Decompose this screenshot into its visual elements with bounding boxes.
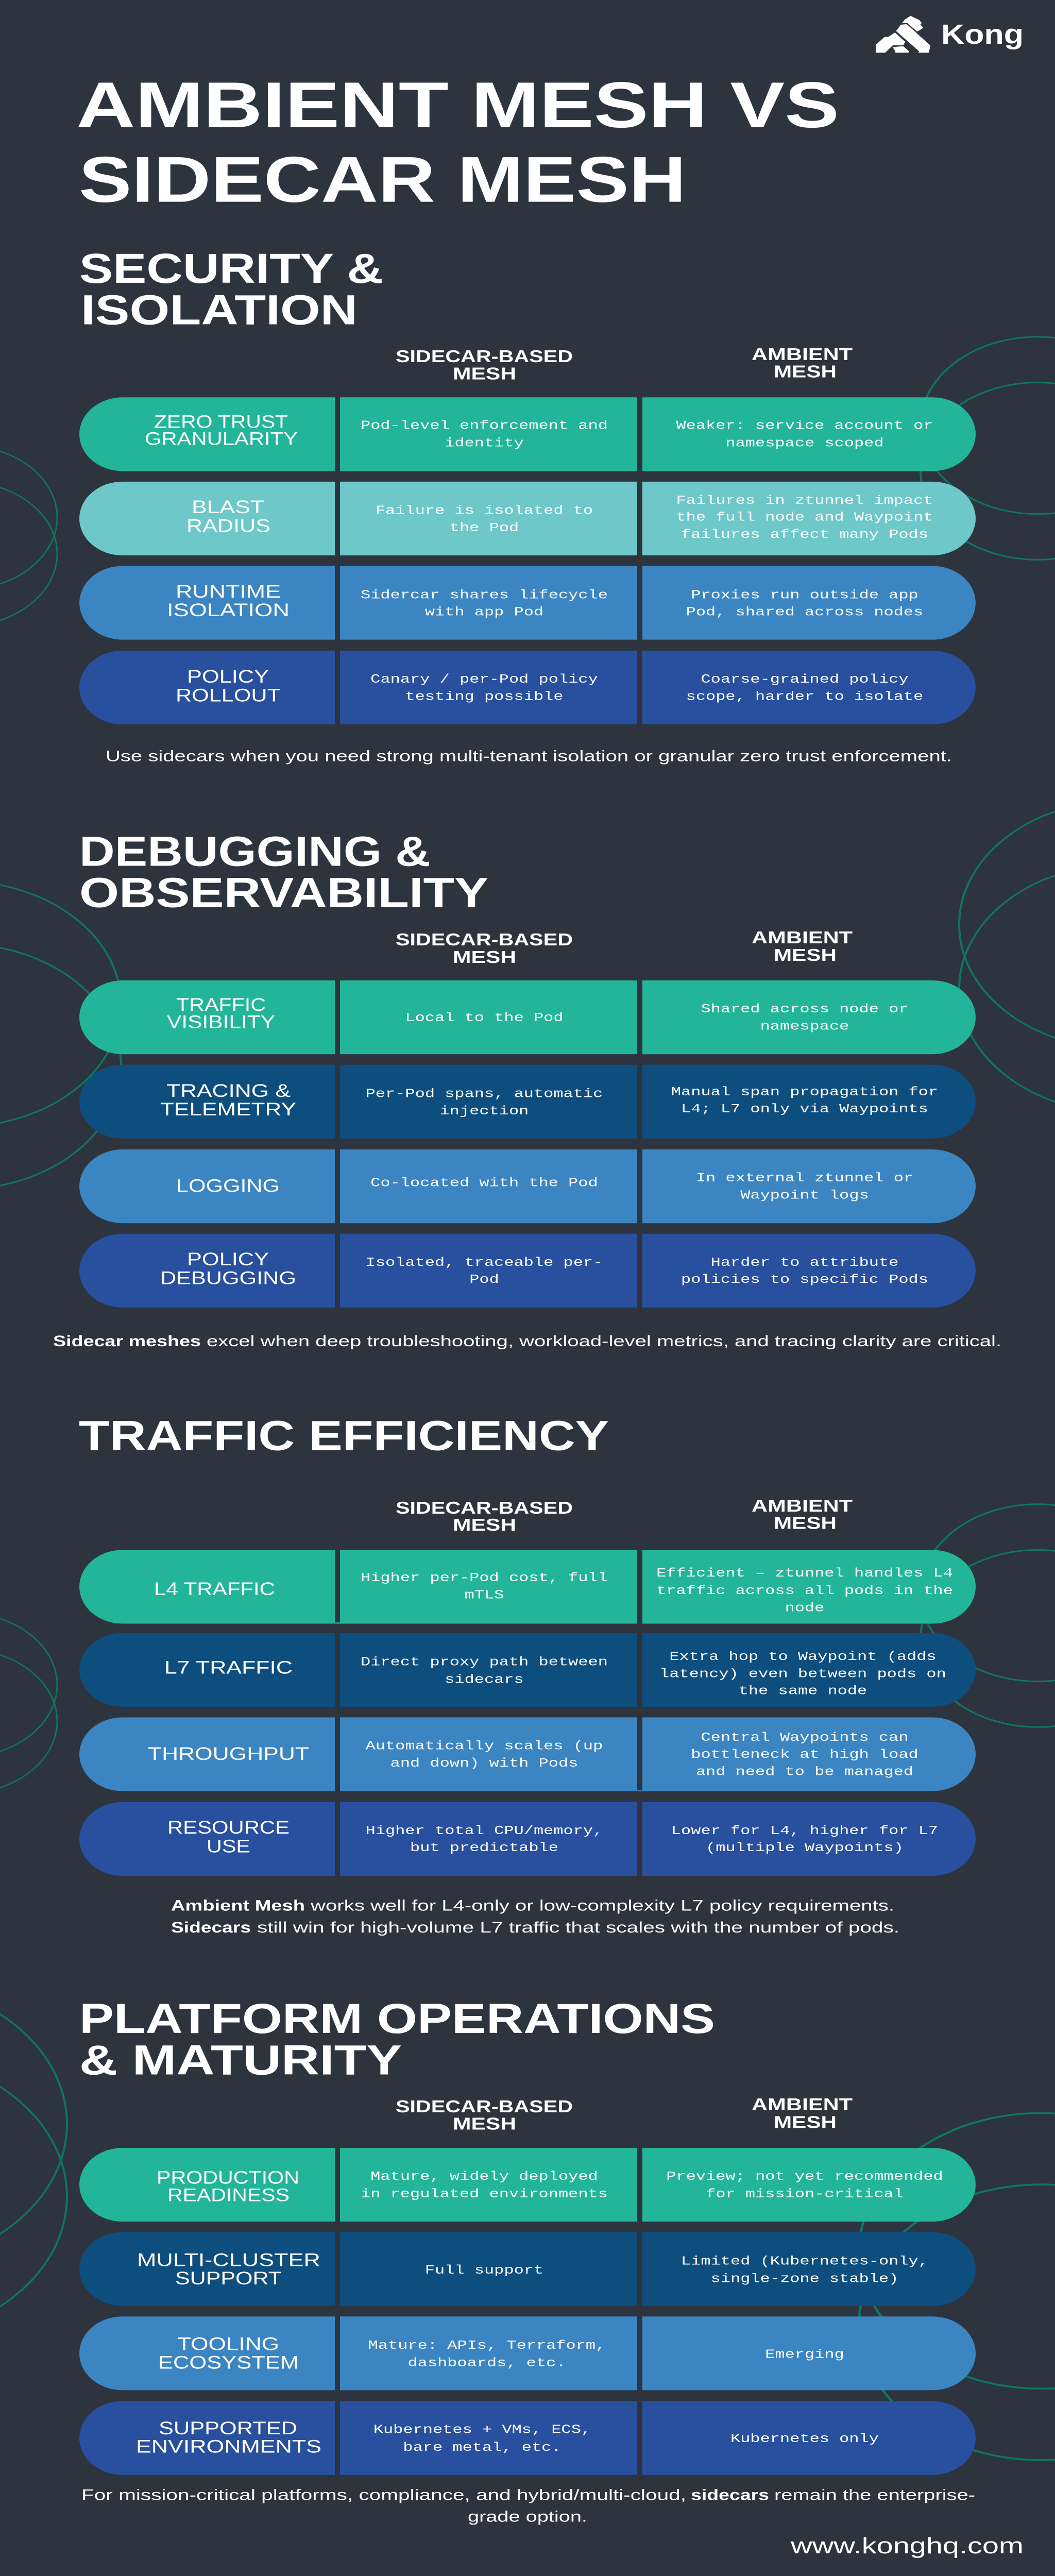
row: multi-cluster support: single-zone stable) — [711, 2272, 898, 2286]
row: zero trust granularity: namespace scoped — [725, 436, 884, 450]
row: zero trust granularity: ZERO TRUST — [154, 411, 288, 432]
row: L4 traffic: Efficient – ztunnel handles L4 — [656, 1566, 953, 1581]
row: L4 traffic: Higher per-Pod cost, full — [361, 1570, 608, 1585]
row: throughput: bottleneck at high load — [691, 1748, 918, 1762]
row: logging: Waypoint logs — [740, 1188, 869, 1202]
column header: ambient mesh: AMBIENT — [752, 1497, 853, 1516]
row: blast radius: BLAST — [192, 497, 264, 517]
callout: security summary: Use sidecars when you need strong multi-tenant isolation or granular zero trust enforcement. — [106, 748, 952, 765]
row: L4 traffic: node — [785, 1601, 824, 1615]
column header: ambient mesh: MESH — [774, 363, 837, 381]
row: policy debugging — [79, 1234, 976, 1308]
logo wordmark: Kong — [941, 19, 1024, 50]
row: zero trust granularity: GRANULARITY — [145, 428, 298, 449]
column header: ambient mesh: MESH — [774, 1514, 837, 1533]
heading: debugging and observability: OBSERVABILITY — [79, 869, 488, 917]
column header: ambient mesh — [752, 345, 853, 381]
row: tooling ecosystem: TOOLING — [177, 2333, 279, 2354]
row: production readiness: Preview; not yet recommended — [666, 2170, 943, 2184]
row: traffic visibility: Local to the Pod — [405, 1010, 564, 1025]
panel: security and isolation — [79, 245, 976, 765]
callout: platform summary: sidecars — [691, 2487, 769, 2503]
row: tracing and telemetry: TELEMETRY — [160, 1099, 296, 1120]
logo: Kong — [876, 16, 1024, 53]
row: tooling ecosystem: ECOSYSTEM — [158, 2352, 299, 2372]
column header: sidecar-based mesh — [396, 1499, 573, 1535]
heading: debugging and observability — [79, 828, 488, 917]
row: policy debugging: Isolated, traceable per- — [366, 1255, 603, 1270]
callout: traffic summary: Ambient Mesh — [171, 1897, 305, 1914]
row: supported environments — [79, 2401, 976, 2475]
row: policy debugging: DEBUGGING — [160, 1267, 296, 1288]
column header: ambient mesh — [752, 928, 853, 965]
row: resource use: Lower for L4, higher for L7 — [671, 1823, 938, 1838]
column header: sidecar-based mesh: MESH — [453, 364, 516, 383]
row: runtime isolation: Pod, shared across nodes — [686, 605, 923, 619]
row: production readiness — [79, 2148, 976, 2222]
row: production readiness: in regulated environments — [361, 2187, 608, 2201]
heading: security and isolation — [79, 245, 383, 333]
column header: sidecar-based mesh: MESH — [453, 948, 516, 967]
row: multi-cluster support: MULTI-CLUSTER — [137, 2249, 320, 2270]
column header: ambient mesh: MESH — [774, 2113, 837, 2132]
row: blast radius: RADIUS — [186, 515, 270, 536]
row: tracing and telemetry: Manual span propagation for — [671, 1084, 938, 1099]
row: resource use: (multiple Waypoints) — [706, 1841, 904, 1855]
row: blast radius: Failures in ztunnel impact — [676, 494, 933, 508]
row: tooling ecosystem: dashboards, etc. — [407, 2356, 566, 2370]
row: multi-cluster support — [79, 2232, 976, 2306]
callout: debugging summary: Sidecar meshes — [53, 1333, 201, 1350]
row: policy rollout: POLICY — [187, 666, 269, 687]
row: supported environments: Kubernetes only — [730, 2432, 879, 2446]
callout: traffic summary: Sidecars — [171, 1919, 251, 1936]
column header: ambient mesh: MESH — [774, 946, 837, 965]
heading: traffic efficiency: TRAFFIC EFFICIENCY — [79, 1412, 609, 1459]
row: traffic visibility — [79, 980, 976, 1054]
row: zero trust granularity: Pod-level enforcement and — [361, 418, 608, 433]
row: resource use: Higher total CPU/memory, — [366, 1823, 603, 1838]
row: logging: In external ztunnel or — [696, 1171, 913, 1185]
row: runtime isolation: Sidercar shares lifecycle — [361, 588, 608, 602]
row: L4 traffic: traffic across all pods in the — [656, 1583, 953, 1598]
heading: platform operations and maturity — [79, 1995, 715, 2083]
row: runtime isolation: ISOLATION — [167, 600, 290, 620]
callout: traffic summary — [171, 1897, 899, 1936]
callout: traffic summary: still win for high-volume L7 traffic that scales with the number of pods. — [257, 1919, 899, 1936]
row: resource use: USE — [207, 1836, 250, 1856]
column header: sidecar-based mesh: MESH — [453, 2114, 516, 2133]
panel: debugging and observability — [53, 828, 1001, 1350]
heading: security and isolation: ISOLATION — [81, 286, 358, 333]
column header: sidecar-based mesh — [396, 930, 573, 967]
row: multi-cluster support: Full support — [425, 2263, 543, 2278]
row: supported environments: bare metal, etc. — [403, 2440, 561, 2455]
row: runtime isolation: with app Pod — [425, 605, 543, 619]
row: policy rollout: scope, harder to isolate — [686, 689, 923, 704]
row: tooling ecosystem — [79, 2316, 976, 2390]
callout: platform summary: For mission-critical platforms, compliance, and hybrid/multi-cloud, — [81, 2487, 686, 2503]
row: L7 traffic: Direct proxy path between — [361, 1655, 608, 1669]
row: multi-cluster support: Limited (Kubernetes-only, — [681, 2254, 928, 2268]
column header: sidecar-based mesh — [396, 2097, 573, 2133]
column header: sidecar-based mesh: SIDECAR-BASED — [396, 930, 573, 950]
row: L7 traffic: Extra hop to Waypoint (adds — [669, 1649, 937, 1664]
row: logging — [79, 1149, 976, 1223]
row: tracing and telemetry: Per-Pod spans, automatic — [366, 1087, 603, 1101]
callout: platform summary: remain the enterprise- — [774, 2487, 975, 2503]
row: L7 traffic: the same node — [739, 1684, 867, 1698]
row: policy rollout: Canary / per-Pod policy — [370, 672, 598, 687]
row: zero trust granularity — [79, 397, 976, 471]
row: policy debugging: Pod — [469, 1273, 499, 1287]
row: throughput: Central Waypoints can — [701, 1730, 909, 1744]
row: production readiness: for mission-critical — [706, 2187, 904, 2201]
callout: traffic summary: works well for L4-only or low-complexity L7 policy requirements. — [310, 1897, 894, 1914]
column header: ambient mesh: AMBIENT — [752, 345, 853, 364]
row: blast radius — [79, 482, 976, 555]
column header: sidecar-based mesh: SIDECAR-BASED — [396, 2097, 573, 2116]
panel: traffic efficiency — [79, 1412, 976, 1936]
panel: platform operations and maturity — [79, 1995, 976, 2526]
title — [76, 69, 839, 216]
row: L7 traffic: sidecars — [445, 1672, 524, 1687]
callout: platform summary: grade option. — [468, 2509, 587, 2526]
row: tracing and telemetry: L4; L7 only via Waypoints — [681, 1102, 928, 1116]
heading: security and isolation: SECURITY & — [79, 245, 383, 292]
row: zero trust granularity: identity — [445, 436, 524, 450]
row: L7 traffic: L7 TRAFFIC — [164, 1657, 293, 1677]
row: L4 traffic — [79, 1550, 976, 1624]
row: tooling ecosystem: Mature: APIs, Terraform, — [368, 2338, 605, 2353]
row: throughput — [79, 1717, 976, 1791]
row: production readiness: READINESS — [167, 2184, 290, 2205]
column header: sidecar-based mesh: SIDECAR-BASED — [396, 1499, 573, 1518]
row: policy debugging: policies to specific Pods — [681, 1273, 928, 1287]
row: resource use: RESOURCE — [167, 1817, 290, 1838]
row: supported environments: SUPPORTED — [159, 2418, 297, 2438]
callout: platform summary — [81, 2487, 975, 2526]
row: traffic visibility: TRAFFIC — [176, 994, 266, 1015]
row: runtime isolation — [79, 566, 976, 640]
row: blast radius: failures affect many Pods — [681, 527, 928, 542]
column header: ambient mesh — [752, 2095, 853, 2132]
column header: sidecar-based mesh: SIDECAR-BASED — [396, 347, 573, 366]
column header: sidecar-based mesh — [396, 347, 573, 383]
column header: ambient mesh: AMBIENT — [752, 2095, 853, 2114]
column header: sidecar-based mesh: MESH — [453, 1516, 516, 1535]
heading: debugging and observability: DEBUGGING & — [79, 828, 431, 875]
heading: platform operations and maturity: PLATFORM OPERATIONS — [79, 1995, 715, 2042]
row: tracing and telemetry: TRACING & — [166, 1080, 291, 1100]
row: blast radius: the full node and Waypoint — [676, 510, 933, 524]
row: tooling ecosystem: Emerging — [765, 2347, 844, 2362]
row: throughput: THROUGHPUT — [148, 1743, 309, 1764]
row: blast radius: Failure is isolated to — [376, 503, 593, 518]
row: runtime isolation: RUNTIME — [176, 581, 281, 602]
row: tracing and telemetry — [79, 1065, 976, 1139]
row: policy rollout: ROLLOUT — [176, 685, 281, 705]
column header: ambient mesh — [752, 1497, 853, 1533]
row: policy debugging: POLICY — [187, 1249, 269, 1269]
row: throughput: Automatically scales (up — [366, 1739, 603, 1753]
row: policy rollout — [79, 651, 976, 724]
row: runtime isolation: Proxies run outside app — [691, 588, 918, 602]
callout: debugging summary: excel when deep troubleshooting, workload-level metrics, and tracing clarity are critical. — [207, 1333, 1001, 1350]
row: production readiness: PRODUCTION — [157, 2167, 299, 2188]
row: policy debugging: Harder to attribute — [711, 1255, 898, 1270]
row: logging: LOGGING — [176, 1175, 280, 1196]
row: throughput: and need to be managed — [696, 1765, 913, 1779]
row: supported environments: Kubernetes + VMs, ECS, — [373, 2422, 591, 2437]
column header: ambient mesh: AMBIENT — [752, 928, 853, 947]
row: throughput: and down) with Pods — [390, 1756, 578, 1770]
row: policy rollout: testing possible — [405, 689, 564, 704]
row: multi-cluster support: SUPPORT — [175, 2268, 282, 2289]
row: traffic visibility: VISIBILITY — [167, 1011, 275, 1032]
row: policy rollout: Coarse-grained policy — [701, 672, 909, 687]
title: SIDECAR MESH — [79, 144, 686, 216]
title: AMBIENT MESH VS — [76, 69, 839, 141]
row: resource use: but predictable — [410, 1841, 558, 1855]
row: L7 traffic — [79, 1633, 976, 1707]
row: resource use — [79, 1802, 976, 1876]
row: L4 traffic: mTLS — [465, 1588, 504, 1602]
row: L7 traffic: latency) even between pods on — [659, 1667, 946, 1681]
row: logging: Co-located with the Pod — [370, 1176, 598, 1190]
footer website: www.konghq.com — [790, 2533, 1024, 2558]
row: blast radius: the Pod — [450, 521, 519, 535]
heading: platform operations and maturity: & MATURITY — [79, 2037, 402, 2083]
icon: Kong gorilla — [876, 16, 930, 53]
row: production readiness: Mature, widely deployed — [370, 2170, 598, 2184]
row: L4 traffic: L4 TRAFFIC — [154, 1579, 275, 1599]
row: zero trust granularity: Weaker: service account or — [676, 418, 933, 433]
row: traffic visibility: Shared across node or — [701, 1002, 909, 1016]
row: traffic visibility: namespace — [760, 1019, 849, 1033]
row: supported environments: ENVIRONMENTS — [136, 2436, 321, 2456]
row: tracing and telemetry: injection — [440, 1104, 529, 1118]
